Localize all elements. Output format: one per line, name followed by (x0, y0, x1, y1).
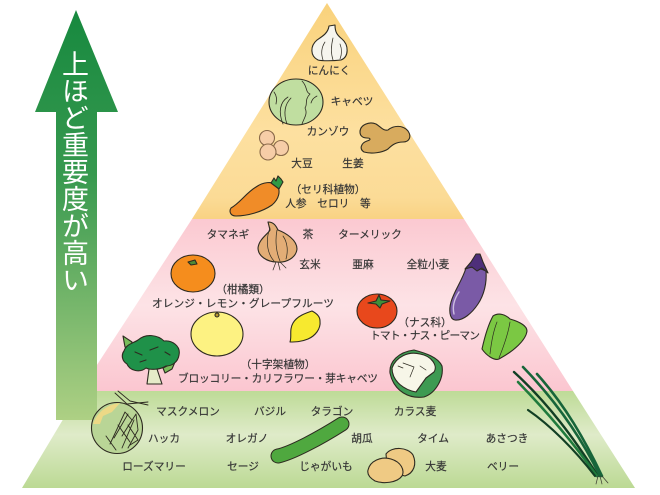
text block: middle tier labels: 全粒小麦 (407, 258, 450, 271)
text block: bottom tier labels: マスクメロン (156, 406, 220, 418)
text block: bottom tier labels: セージ (227, 461, 259, 473)
text block: bottom tier labels: ベリー (487, 461, 519, 473)
text block: bottom tier labels: あさつき (486, 433, 528, 445)
text block: middle tier labels: タマネギ (207, 229, 250, 241)
icon: carrot (230, 176, 283, 216)
text block: middle tier labels: （ナス科） (398, 316, 452, 329)
icon: eggplant (450, 254, 488, 320)
pyramid tier: middle (pink) (80, 219, 573, 391)
icon: cucumber (278, 424, 342, 456)
text block: bottom tier labels: バジル (254, 406, 286, 418)
icon: grapefruit (191, 312, 243, 356)
text block: bottom tier labels (122, 405, 528, 473)
text block: middle tier labels: （十字架植物） (241, 358, 315, 371)
text block: bottom tier labels: オレガノ (226, 433, 268, 445)
text block: top tier labels: キャベツ (331, 96, 373, 108)
text block: middle tier labels: オレンジ・レモン・グレープフルーツ (152, 297, 334, 310)
icon: melon (92, 391, 148, 454)
icon: lemon (290, 311, 320, 342)
arrow label: 上ほど重要度が高い (58, 50, 88, 293)
text block: top tier labels: にんにく (308, 65, 350, 77)
icon: onion (258, 222, 297, 270)
text block: bottom tier labels: タイム (417, 433, 449, 445)
text block: middle tier labels: ターメリック (338, 229, 402, 241)
arrow: importance increases upward (35, 10, 118, 420)
text block: bottom tier labels: ハッカ (148, 433, 180, 445)
text block: middle tier labels: 茶 (303, 228, 314, 241)
text block: middle tier labels: 玄米 (299, 258, 321, 271)
text block: bottom tier labels: ローズマリー (122, 460, 186, 473)
text block: top tier labels (285, 65, 373, 210)
icon: cauliflower (390, 350, 442, 397)
text block: middle tier labels (152, 228, 480, 385)
text block: top tier labels: 大豆 (291, 157, 313, 170)
pyramid tier: top (orange) (192, 3, 464, 219)
text block: top tier labels: 生姜 (342, 157, 364, 170)
text block: top tier labels: カンゾウ (307, 126, 349, 138)
icon: chives (514, 367, 608, 484)
pyramid tier: bottom (green) (22, 391, 635, 488)
text block: bottom tier labels: 大麦 (425, 460, 447, 473)
text block: middle tier labels: トマト・ナス・ピーマン (370, 330, 480, 342)
icon: broccoli (122, 336, 179, 384)
icon: potatoes (368, 448, 415, 483)
icon: cabbage (269, 79, 323, 125)
text block: bottom tier labels: 胡瓜 (351, 432, 373, 445)
icon: tomato (357, 294, 397, 328)
icon: soybeans (260, 130, 288, 160)
text block: middle tier labels: （柑橘類） (216, 283, 270, 296)
icon: green pepper (482, 314, 527, 359)
text block: middle tier labels: ブロッコリー・カリフラワー・芽キャベツ (178, 372, 378, 385)
text block: bottom tier labels: じゃがいも (299, 460, 353, 473)
icon: ginger (360, 123, 410, 153)
text block: bottom tier labels: タラゴン (311, 405, 353, 418)
text block: top tier labels: （セリ科植物） (291, 183, 365, 196)
text block: middle tier labels: 亜麻 (352, 259, 374, 271)
text block: top tier labels: 人参 セロリ 等 (285, 197, 371, 210)
icon: orange (171, 255, 215, 292)
icon: garlic (312, 25, 347, 61)
text block: bottom tier labels: カラス麦 (394, 406, 437, 418)
